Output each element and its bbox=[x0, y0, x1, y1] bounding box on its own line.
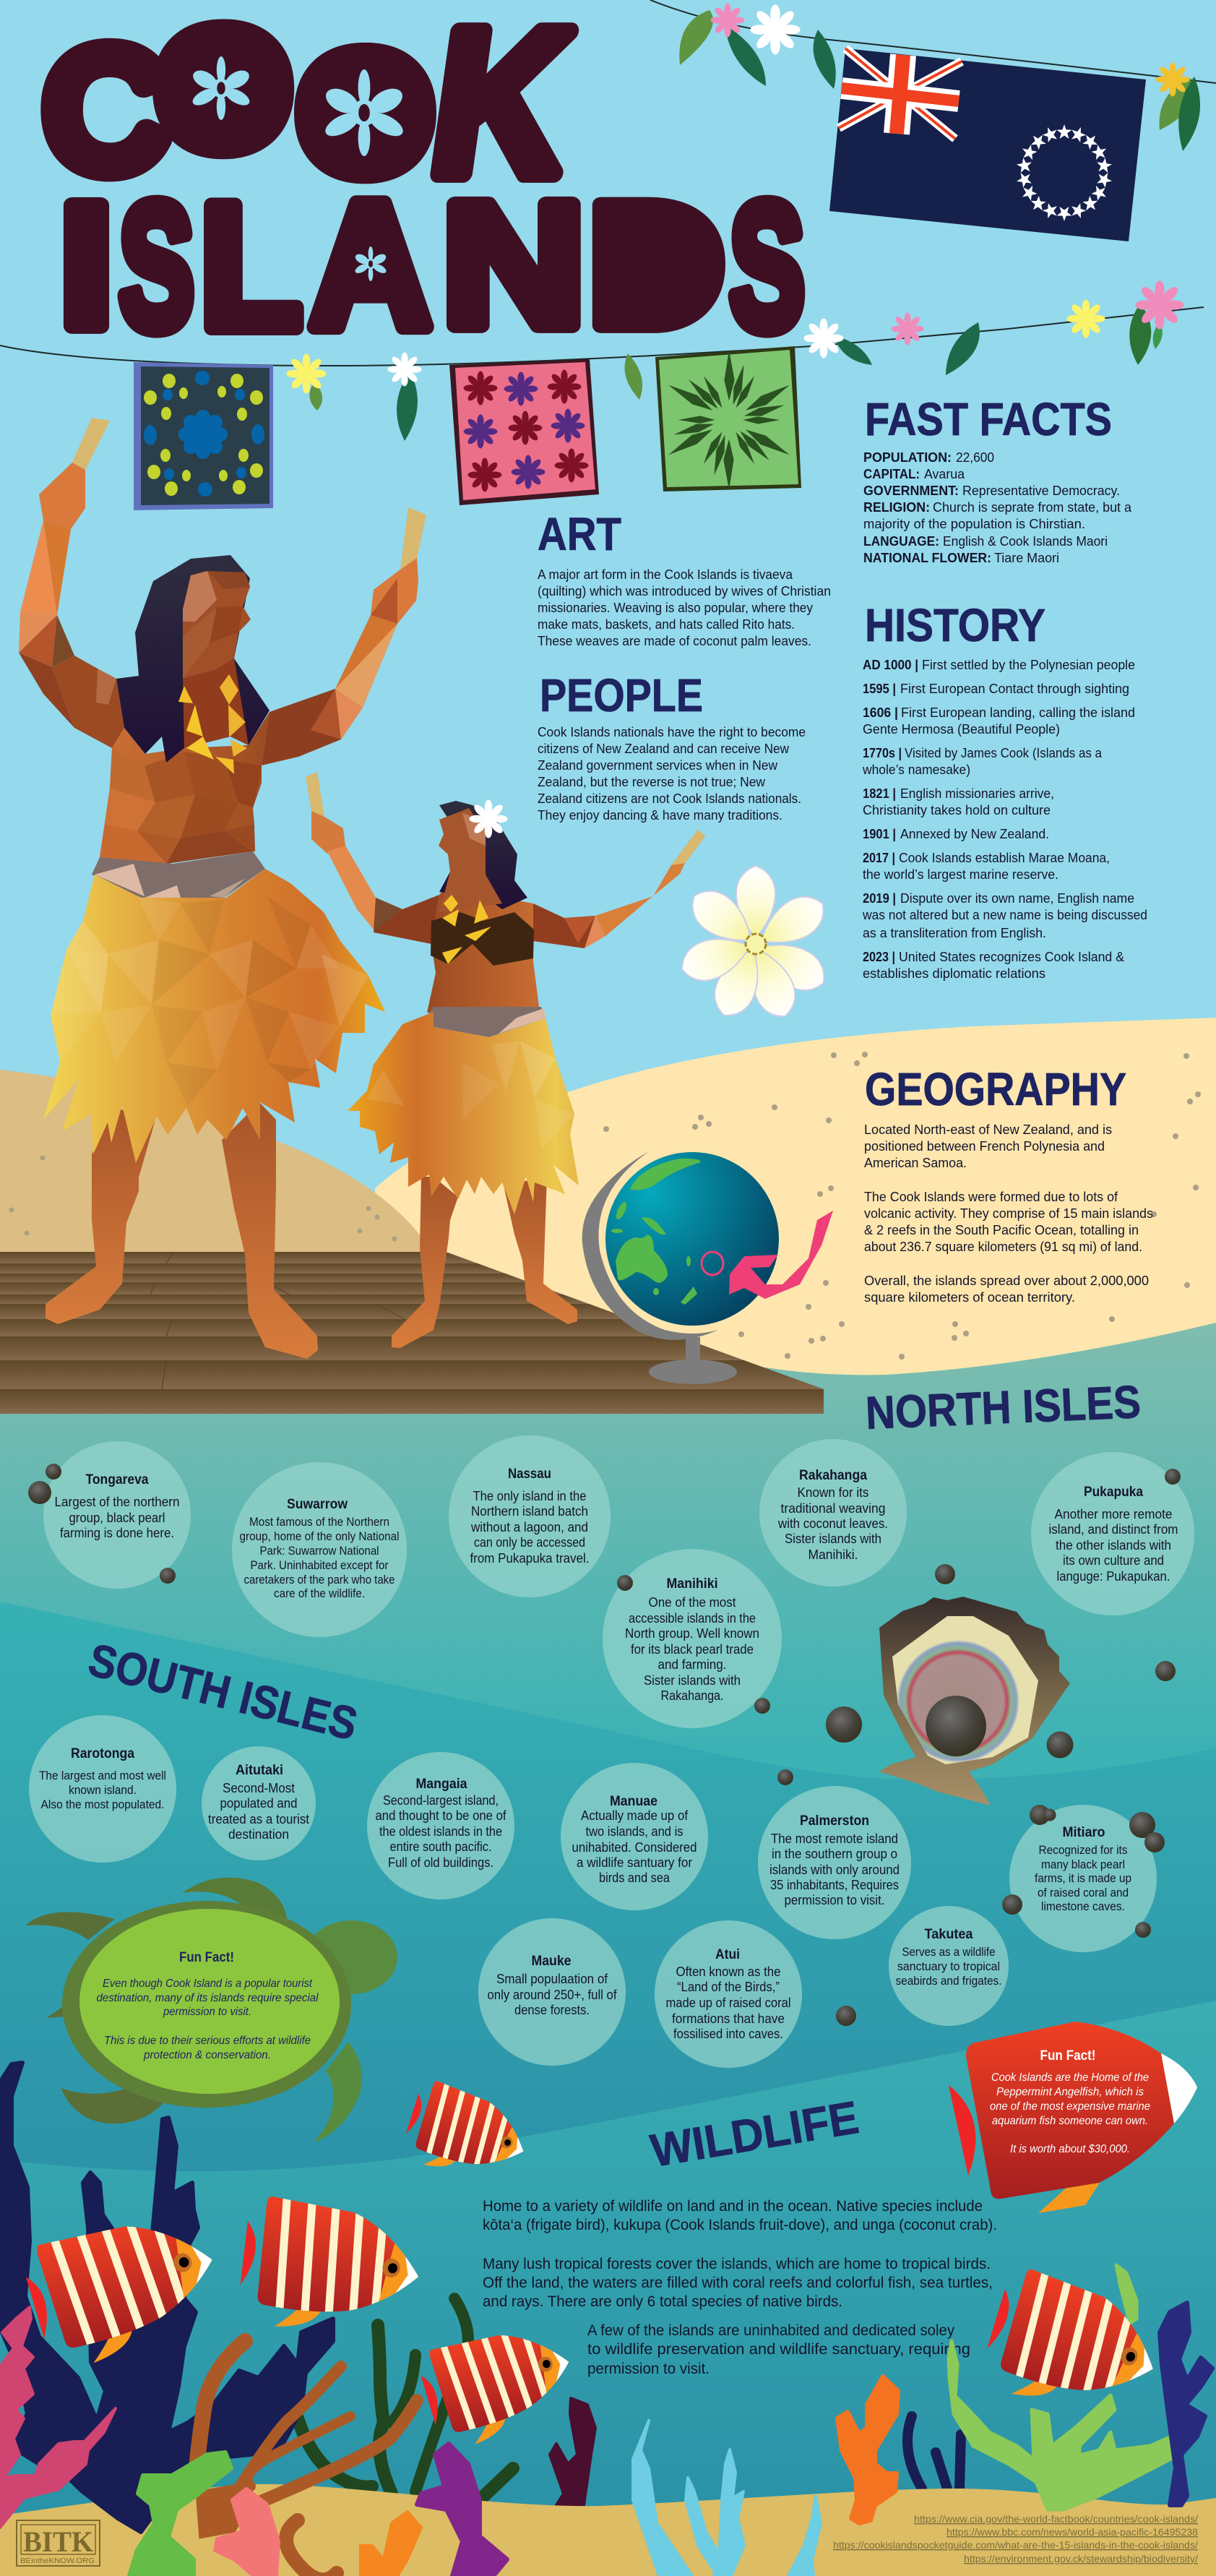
history timeline: Cook Islands establish Marae Moana, bbox=[899, 851, 1110, 865]
small dancer left arm bbox=[306, 772, 439, 944]
fast facts list bbox=[863, 450, 1132, 565]
art text block: A major art form in the Cook Islands is tivaeva bbox=[538, 567, 793, 582]
island: Takutea: sanctuary to tropical bbox=[897, 1960, 1000, 1973]
island: Takutea: Serves as a wildlife bbox=[902, 1946, 996, 1959]
island: Mitiaro: limestone caves. bbox=[1041, 1900, 1125, 1913]
island: Pukapuka bbox=[1031, 1452, 1194, 1615]
turtle fun fact text: protection & conservation. bbox=[143, 2049, 271, 2061]
pink tivaevae quilt bbox=[449, 359, 599, 505]
history timeline: the world’s largest marine reserve. bbox=[863, 867, 1058, 882]
island: Mangaia bbox=[367, 1752, 514, 1899]
history timeline: First European Contact through sighting bbox=[900, 682, 1129, 696]
island: Nassau: The only island in the bbox=[473, 1489, 587, 1503]
purple coral bbox=[417, 2444, 507, 2576]
island: Atui: fossilised into caves. bbox=[673, 2027, 783, 2041]
geography text block bbox=[864, 1122, 1153, 1305]
big dancer belt bbox=[92, 851, 265, 898]
history timeline: 1595 | bbox=[863, 682, 896, 696]
island: Mitiaro: Mitiaro bbox=[1062, 1825, 1105, 1840]
orange bottom coral bbox=[361, 2512, 421, 2576]
art text block: (quilting) which was introduced by wives of Christian bbox=[538, 584, 831, 598]
island: Mangaia: and thought to be one of bbox=[376, 1808, 506, 1823]
history timeline: 1901 | bbox=[863, 827, 896, 841]
fast facts list: 22,600 bbox=[956, 450, 994, 465]
wildlife text block: A few of the islands are uninhabited and dedicated soley bbox=[587, 2322, 954, 2339]
wildlife text block: permission to visit. bbox=[587, 2361, 710, 2377]
island: Manuae bbox=[561, 1763, 708, 1910]
BITK logo: BEintheKNOW.ORG bbox=[20, 2557, 95, 2565]
wildlife text block: Home to a variety of wildlife on land and in the ocean. Native species include bbox=[483, 2198, 983, 2215]
turtle fun fact text: Even though Cook Island is a popular tourist bbox=[103, 1978, 313, 1990]
navy coral bbox=[0, 2063, 333, 2532]
geography text block: volcanic activity. They comprise of 15 main islands bbox=[864, 1206, 1153, 1221]
heading: ART: ART bbox=[538, 508, 621, 560]
island: Rakahanga bbox=[759, 1439, 907, 1587]
island: Atui: made up of raised coral bbox=[666, 1996, 790, 2010]
small dancer hair bbox=[439, 801, 527, 909]
wooden deck bbox=[0, 1252, 824, 1414]
island: Manihiki: North group. Well known bbox=[625, 1626, 759, 1641]
fish 3 bbox=[415, 2307, 615, 2453]
title flowers bbox=[190, 56, 407, 281]
small dancer torso bbox=[427, 866, 539, 1013]
geography text block: American Samoa. bbox=[864, 1156, 967, 1170]
big dancer legs bbox=[46, 1102, 318, 1359]
fun fact fish shape bbox=[949, 2022, 1197, 2213]
big dancer skirt facets bbox=[51, 896, 368, 1070]
history timeline: establishes diplomatic relations bbox=[863, 966, 1045, 981]
island: Rarotonga: Also the most populated. bbox=[40, 1798, 165, 1811]
ocean middle layer bbox=[0, 1602, 1216, 2576]
island: Mitiaro: many black pearl bbox=[1041, 1858, 1125, 1871]
island: Aitutaki bbox=[202, 1746, 316, 1860]
geography text block: positioned between French Polynesia and bbox=[864, 1139, 1105, 1154]
art text block: make mats, baskets, and hats called Rito hats. bbox=[538, 617, 795, 632]
island: Palmerston: islands with only around bbox=[769, 1863, 900, 1877]
globe stand bbox=[582, 1145, 782, 1384]
island: Mangaia: the oldest islands in the bbox=[379, 1824, 502, 1839]
fun fact fish text: one of the most expensive marine bbox=[990, 2100, 1150, 2113]
sky background bbox=[0, 0, 1216, 1373]
island: Rakahanga: Rakahanga bbox=[799, 1468, 867, 1483]
title letters: S bbox=[730, 166, 804, 366]
history timeline: Christianity takes hold on culture bbox=[863, 803, 1051, 817]
fun fact fish text: Fun Fact! bbox=[1040, 2048, 1095, 2064]
ocean upper layer bbox=[0, 1287, 1216, 1937]
island: Suwarrow: Most famous of the Northern bbox=[249, 1516, 389, 1529]
globe with arrow bbox=[582, 1145, 833, 1384]
history timeline: Gente Hermosa (Beautiful People) bbox=[863, 722, 1060, 737]
dark blue coral bbox=[1160, 2303, 1212, 2505]
history timeline: AD 1000 | bbox=[863, 658, 918, 672]
island: Manihiki: and farming. bbox=[657, 1657, 727, 1672]
island: Suwarrow: group, home of the only National bbox=[240, 1530, 399, 1543]
island: Nassau: from Pukapuka travel. bbox=[470, 1551, 590, 1566]
island: Pukapuka: island, and distinct from bbox=[1049, 1522, 1178, 1537]
island: Pukapuka: Pukapuka bbox=[1084, 1485, 1143, 1500]
big dancer hair bbox=[116, 555, 269, 763]
globe sphere bbox=[605, 1152, 779, 1326]
turtle fun fact text: This is due to their serious efforts at wildlife bbox=[104, 2035, 311, 2047]
history timeline: 2017 | bbox=[863, 851, 895, 865]
island: Pukapuka: languge: Pukapukan. bbox=[1056, 1569, 1170, 1584]
island: Mangaia: Mangaia bbox=[416, 1777, 467, 1792]
island: Manihiki: One of the most bbox=[649, 1595, 736, 1610]
blue tivaevae quilt bbox=[134, 362, 273, 510]
source links: https://environment.gov.ck/stewardship/biodiversity/ bbox=[964, 2553, 1198, 2564]
wildlife text block: Off the land, the waters are filled with coral reefs and colorful fish, sea turtles, bbox=[483, 2275, 993, 2291]
island: Mauke bbox=[478, 1918, 626, 2066]
small dancer skirt facets bbox=[367, 1041, 574, 1149]
island: Palmerston: 35 inhabitants, Requires bbox=[770, 1878, 899, 1892]
island: Manuae: Actually made up of bbox=[581, 1808, 689, 1823]
maroon coral bbox=[550, 2398, 595, 2505]
turtle flippers and head bbox=[25, 1878, 397, 2142]
salmon coral bbox=[215, 2489, 278, 2576]
small navy seaweed bbox=[907, 2416, 961, 2489]
green tivaevae quilt bbox=[655, 346, 801, 491]
island: Pukapuka: Another more remote bbox=[1055, 1507, 1172, 1521]
flag ring of stars bbox=[1015, 124, 1113, 221]
heading: SOUTH ISLES: SOUTH ISLES bbox=[84, 1633, 363, 1751]
island: Manuae: unihabited. Considered bbox=[572, 1840, 697, 1855]
island: Manuae: Manuae bbox=[610, 1794, 657, 1809]
island: Rarotonga: The largest and most well bbox=[39, 1769, 166, 1782]
fast facts list: majority of the population is Chirstian. bbox=[863, 517, 1085, 531]
island: Manihiki: Sister islands with bbox=[644, 1673, 741, 1688]
island: Atui: Atui bbox=[715, 1947, 740, 1962]
source links bbox=[833, 2513, 1198, 2564]
fast facts list: NATIONAL FLOWER: bbox=[863, 551, 991, 565]
island: Pukapuka: the other islands with bbox=[1056, 1538, 1171, 1553]
island: Suwarrow: Park: Suwarrow National bbox=[260, 1545, 379, 1558]
island: Mangaia: Full of old buildings. bbox=[388, 1855, 493, 1870]
island: Mauke: only around 250+, full of bbox=[487, 1988, 617, 2002]
island: Pukapuka: its own culture and bbox=[1063, 1553, 1164, 1568]
history timeline bbox=[862, 658, 1147, 981]
turtle fun fact text: permission to visit. bbox=[163, 2006, 251, 2018]
island: Atui: formations that have bbox=[672, 2012, 785, 2026]
island: Nassau: without a lagoon, and bbox=[470, 1520, 588, 1534]
wildlife text block: and rays. There are only 6 total species of native birds. bbox=[483, 2293, 842, 2310]
fish 5 bbox=[973, 2260, 1207, 2447]
history timeline: 2019 | bbox=[863, 891, 896, 906]
title letters: N bbox=[442, 166, 585, 363]
island: Mitiaro: Recognized for its bbox=[1039, 1844, 1127, 1857]
big dancer torso bbox=[100, 712, 269, 857]
island: Mangaia: entire south pacific. bbox=[390, 1839, 491, 1854]
globe continents bbox=[611, 1159, 701, 1305]
island: Rarotonga bbox=[29, 1715, 176, 1863]
geography text block: square kilometers of ocean territory. bbox=[864, 1290, 1075, 1305]
heading: FAST FACTS: FAST FACTS bbox=[865, 393, 1112, 445]
globe island marker ring bbox=[702, 1252, 723, 1275]
wildlife text block: to wildlife preservation and wildlife sanctuary, requiring bbox=[587, 2341, 970, 2358]
art text block bbox=[538, 567, 831, 648]
history timeline: First settled by the Polynesian people bbox=[922, 658, 1135, 672]
geography text block: about 236.7 square kilometers (91 sq mi) of land. bbox=[864, 1240, 1142, 1254]
ocean lower layer bbox=[0, 2001, 1216, 2576]
oyster with black pearl bbox=[879, 1597, 1070, 1806]
island: Suwarrow: Park. Uninhabited except for bbox=[250, 1559, 389, 1572]
turtle shell bbox=[62, 1901, 351, 2108]
history timeline: whole’s namesake) bbox=[862, 763, 970, 777]
small dancer necklace bbox=[442, 895, 491, 964]
fish 4 bbox=[397, 2074, 562, 2204]
island: Manihiki: Manihiki bbox=[666, 1576, 718, 1592]
wildlife text block: Many lush tropical forests cover the islands, which are home to tropical birds. bbox=[483, 2256, 991, 2272]
fish 1 bbox=[18, 2191, 270, 2374]
island: Atui: “Land of the Birds,” bbox=[677, 1980, 780, 1994]
fun fact fish text: Peppermint Angelfish, which is bbox=[996, 2086, 1144, 2098]
big dancer necklace bbox=[178, 674, 247, 774]
small dancer right arm bbox=[533, 830, 705, 948]
geography text block: & 2 reefs in the South Pacific Ocean, totalling in bbox=[864, 1223, 1139, 1237]
island: Mangaia: Second-largest island, bbox=[383, 1793, 499, 1808]
island: Rakahanga: Manihiki. bbox=[808, 1547, 858, 1562]
history timeline: First European landing, calling the island bbox=[901, 705, 1135, 720]
big dancer left arm bbox=[19, 418, 124, 748]
title letters: D bbox=[588, 168, 725, 363]
heading: HISTORY: HISTORY bbox=[865, 599, 1045, 651]
island: Palmerston: The most remote island bbox=[771, 1832, 898, 1846]
fast facts list: RELIGION: bbox=[863, 500, 930, 515]
island: Rarotonga: Rarotonga bbox=[71, 1746, 134, 1761]
source links: https://www.bbc.com/news/world-asia-pacific-16495238 bbox=[947, 2526, 1198, 2538]
light sand beach bbox=[375, 1018, 1216, 1375]
big dancer torso facets bbox=[100, 748, 262, 864]
art text block: missionaries. Weaving is also popular, where they bbox=[538, 601, 813, 615]
island: Nassau bbox=[449, 1435, 611, 1597]
geography text block: Located North-east of New Zealand, and is bbox=[864, 1122, 1112, 1137]
fast facts list: GOVERNMENT: bbox=[863, 484, 959, 498]
island: Rakahanga: Sister islands with bbox=[785, 1532, 881, 1546]
people text block: Zealand government services when in New bbox=[538, 758, 778, 773]
small dancer figure bbox=[306, 772, 705, 1348]
island: Takutea: seabirds and frigates. bbox=[896, 1975, 1001, 1988]
dark green seaweed bbox=[298, 2298, 513, 2498]
island: Palmerston: in the southern group o bbox=[772, 1847, 897, 1861]
island: Manuae: two islands, and is bbox=[585, 1824, 684, 1839]
light blue coral bbox=[633, 2421, 821, 2576]
people text block: They enjoy dancing & have many traditions. bbox=[538, 808, 782, 823]
BITK logo: BITK bbox=[23, 2525, 93, 2558]
history timeline: 1770s | bbox=[863, 746, 902, 760]
island: Suwarrow: care of the wildlife. bbox=[274, 1587, 365, 1600]
title letters bbox=[46, 0, 804, 366]
fast facts list: English & Cook Islands Maori bbox=[943, 534, 1108, 549]
sand speckles bbox=[9, 1052, 1201, 1360]
geography text block: Overall, the islands spread over about 2,000,000 bbox=[864, 1274, 1149, 1288]
island: Tongareva: farming is done here. bbox=[60, 1526, 174, 1540]
island bubbles bbox=[29, 1435, 1194, 2068]
fast facts list: Tiare Maori bbox=[994, 551, 1059, 565]
fun fact fish text: aquarium fish someone can own. bbox=[992, 2115, 1148, 2127]
angelfish school bbox=[18, 2074, 1207, 2453]
wildlife text block: kōta‘a (frigate bird), kukupa (Cook Islands fruit-dove), and unga (coconut crab). bbox=[483, 2217, 997, 2233]
big dancer skirt shadow facets bbox=[152, 896, 311, 1106]
island: Manihiki bbox=[603, 1549, 782, 1728]
island: Mauke: Mauke bbox=[532, 1954, 571, 1969]
island: Manuae: birds and sea bbox=[599, 1871, 670, 1885]
title letters: A bbox=[310, 165, 431, 365]
island: Rakahanga: traditional weaving bbox=[780, 1501, 886, 1516]
big dancer figure bbox=[19, 418, 426, 1359]
orange coral bbox=[837, 2377, 898, 2523]
island: Suwarrow: Suwarrow bbox=[287, 1497, 348, 1512]
small dancer hair flower bbox=[469, 799, 508, 838]
history timeline: Dispute over its own name, English name bbox=[900, 891, 1134, 906]
island: Aitutaki: Second-Most bbox=[223, 1781, 295, 1795]
people text block: Zealand citizens are not Cook Islands nationals. bbox=[538, 791, 801, 806]
island: Mitiaro: farms, it is made up bbox=[1035, 1872, 1131, 1885]
island: Palmerston: permission to visit. bbox=[785, 1893, 884, 1907]
small dancer face and neck bbox=[439, 808, 502, 912]
island: Nassau: Nassau bbox=[508, 1467, 551, 1482]
history timeline: Visited by James Cook (Islands as a bbox=[905, 746, 1103, 760]
island: Takutea bbox=[889, 1906, 1009, 2026]
fast facts list: CAPITAL: bbox=[863, 467, 920, 481]
heading: WILDLIFE: WILDLIFE bbox=[647, 2091, 862, 2177]
island: Manihiki: for its black pearl trade bbox=[631, 1642, 754, 1657]
fast facts list: Church is seprate from state, but a bbox=[933, 500, 1132, 515]
island: Tongareva: Tongareva bbox=[85, 1472, 149, 1487]
fast facts list: Avarua bbox=[924, 467, 965, 481]
lower string with leaves and flowers bbox=[0, 280, 1204, 441]
island: Mitiaro: of raised coral and bbox=[1038, 1886, 1129, 1899]
heading: NORTH ISLES: NORTH ISLES bbox=[865, 1375, 1142, 1439]
turtle fun fact bbox=[25, 1878, 397, 2142]
history timeline: as a transliteration from English. bbox=[863, 926, 1046, 940]
history timeline: 2023 | bbox=[863, 950, 895, 964]
flag of the Cook Islands bbox=[829, 48, 1146, 241]
green coral bbox=[129, 2452, 231, 2576]
source links: https://cookislandspocketguide.com/what-are-the-15-islands-in-the-cook-islands/ bbox=[833, 2539, 1198, 2551]
tan sand dune bbox=[0, 1070, 434, 1258]
island: Aitutaki: populated and bbox=[220, 1796, 298, 1811]
island: Rakahanga: with coconut leaves. bbox=[777, 1516, 888, 1531]
heading: PEOPLE: PEOPLE bbox=[540, 669, 703, 721]
sea floor sand bbox=[0, 2484, 1216, 2576]
history timeline: was not altered but a new name is being discussed bbox=[862, 908, 1147, 922]
small dancer belt bbox=[427, 1007, 546, 1037]
turtle fun fact text: destination, many of its islands require special bbox=[97, 1992, 319, 2004]
island: Mauke: dense forests. bbox=[514, 2003, 590, 2017]
island: Atui bbox=[655, 1920, 802, 2068]
pink coral bbox=[0, 2307, 116, 2528]
title letters: O bbox=[295, 14, 436, 212]
turtle fun fact text: Fun Fact! bbox=[179, 1950, 234, 1965]
source links: https://www.cia.gov/the-world-factbook/countries/cook-islands/ bbox=[914, 2513, 1198, 2525]
wildlife text block bbox=[483, 2198, 997, 2377]
small dancer legs bbox=[392, 1177, 577, 1348]
island: Rakahanga: Known for its bbox=[798, 1485, 868, 1500]
fast facts list: LANGUAGE: bbox=[863, 534, 939, 549]
island: Aitutaki: destination bbox=[228, 1827, 289, 1842]
title letters: L bbox=[200, 168, 302, 366]
fish 2 bbox=[232, 2190, 467, 2353]
people text block bbox=[538, 725, 806, 823]
upper string with leaves and flowers bbox=[650, 0, 1216, 151]
island: Aitutaki: Aitutaki bbox=[236, 1763, 283, 1778]
history timeline: English missionaries arrive, bbox=[900, 786, 1054, 801]
flag canton bbox=[839, 48, 962, 139]
island: Tongareva: group, black pearl bbox=[69, 1511, 165, 1525]
big dancer right arm bbox=[262, 507, 426, 765]
island: Aitutaki: treated as a tourist bbox=[208, 1812, 309, 1826]
geography text block: The Cook Islands were formed due to lots of bbox=[864, 1190, 1118, 1204]
history timeline: 1821 | bbox=[863, 786, 896, 801]
island: Palmerston: Palmerston bbox=[800, 1813, 869, 1829]
island: Tongareva bbox=[43, 1441, 191, 1589]
BITK logo bbox=[17, 2520, 100, 2566]
seaweed behind sand bbox=[298, 2298, 961, 2505]
big dancer grass skirt bbox=[43, 869, 385, 1163]
scattered black pearls bbox=[28, 1464, 1181, 2026]
title letters: C bbox=[46, 17, 165, 202]
title: COOK ISLANDS bbox=[46, 0, 804, 366]
island: Mitiaro bbox=[1009, 1805, 1157, 1952]
small dancer bikini top bbox=[431, 912, 534, 966]
island: Manihiki: Rakahanga. bbox=[660, 1688, 724, 1703]
fun fact fish text: Cook Islands are the Home of the bbox=[991, 2071, 1149, 2084]
people text block: Zealand, but the reverse is not true; New bbox=[538, 775, 766, 789]
tiare maori flower bbox=[676, 866, 833, 1023]
art text block: These weaves are made of coconut palm leaves. bbox=[538, 634, 811, 648]
island: Manuae: a wildlife santuary for bbox=[577, 1855, 692, 1870]
peppermint angelfish fun fact bbox=[949, 2022, 1197, 2213]
island: Suwarrow: caretakers of the park who take bbox=[244, 1573, 394, 1587]
island: Suwarrow bbox=[232, 1462, 407, 1637]
fun fact fish text bbox=[990, 2048, 1150, 2155]
island: Mauke: Small populaation of bbox=[496, 1972, 608, 1986]
fast facts list: Representative Democracy. bbox=[962, 484, 1120, 498]
island: Atui: Often known as the bbox=[676, 1965, 780, 1979]
people text block: Cook Islands nationals have the right to become bbox=[538, 725, 806, 739]
island: Tongareva: Largest of the northern bbox=[55, 1495, 179, 1509]
fun fact fish text: It is worth about $30,000. bbox=[1010, 2143, 1130, 2155]
island: Rarotonga: known island. bbox=[69, 1784, 137, 1797]
heading: GEOGRAPHY: GEOGRAPHY bbox=[865, 1063, 1126, 1115]
history timeline: 1606 | bbox=[863, 705, 898, 720]
history timeline: United States recognizes Cook Island & bbox=[899, 950, 1124, 964]
turtle fun fact text bbox=[97, 1950, 319, 2061]
coral reef bbox=[0, 2063, 1212, 2576]
people text block: citizens of New Zealand and can receive New bbox=[538, 742, 790, 756]
fast facts list: POPULATION: bbox=[863, 450, 952, 465]
island: Nassau: can only be accessed bbox=[474, 1535, 585, 1550]
big dancer head and neck bbox=[183, 571, 251, 748]
island: Manihiki: accessible islands in the bbox=[629, 1611, 756, 1626]
history timeline: Annexed by New Zealand. bbox=[900, 827, 1049, 841]
island: Palmerston bbox=[758, 1786, 911, 1939]
brown coral bbox=[196, 2341, 417, 2576]
island: Takutea: Takutea bbox=[925, 1927, 973, 1942]
pink arrow bbox=[729, 1211, 833, 1299]
title letters: I bbox=[59, 168, 113, 364]
light green coral bbox=[949, 2265, 1178, 2510]
small dancer grass skirt bbox=[348, 1012, 579, 1214]
title letters: S bbox=[119, 166, 194, 366]
island: Nassau: Northern island batch bbox=[471, 1504, 588, 1519]
